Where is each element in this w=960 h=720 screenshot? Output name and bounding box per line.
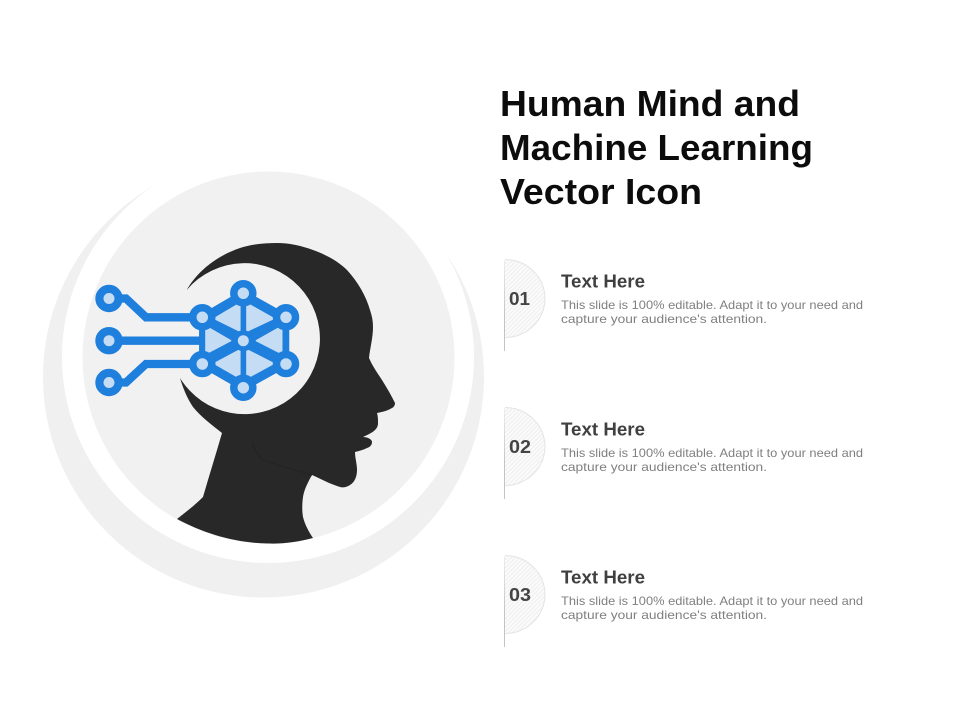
background crescent ring bbox=[43, 151, 484, 598]
icon: neural network circuit bbox=[99, 284, 296, 397]
circuit traces bbox=[109, 298, 202, 382]
item 02 bbox=[504, 408, 863, 499]
icon: human head silhouette bbox=[177, 243, 395, 544]
inner circle bbox=[82, 172, 454, 544]
item text 02: This slide is 100% editable. Adapt it to your need and bbox=[561, 446, 863, 460]
item heading 03: Text Here bbox=[561, 568, 645, 588]
item heading 01: Text Here bbox=[561, 272, 645, 292]
item text 03: capture your audience's attention. bbox=[561, 608, 767, 622]
item 01 bbox=[504, 260, 863, 351]
number badge 02: 02 bbox=[509, 436, 531, 457]
jaw shadow line bbox=[252, 443, 312, 475]
item heading 02: Text Here bbox=[561, 420, 645, 440]
number badge 01 bbox=[504, 260, 545, 351]
title: Vector Icon bbox=[500, 171, 702, 212]
number badge 03: 03 bbox=[509, 584, 531, 605]
item text 03: This slide is 100% editable. Adapt it to your need and bbox=[561, 594, 863, 608]
number badge 02 bbox=[504, 408, 545, 499]
item text 01: capture your audience's attention. bbox=[561, 312, 767, 326]
item text 01 bbox=[561, 298, 863, 326]
title bbox=[500, 83, 813, 212]
title: Human Mind and bbox=[500, 83, 800, 124]
item 03 bbox=[504, 556, 863, 647]
number badge 01: 01 bbox=[509, 288, 530, 309]
hexagon body bbox=[202, 293, 286, 388]
network nodes bbox=[99, 284, 296, 397]
item text 02: capture your audience's attention. bbox=[561, 460, 767, 474]
hexagon light cells bbox=[206, 304, 282, 378]
item text 02 bbox=[561, 446, 863, 474]
item text 03 bbox=[561, 594, 863, 622]
number badge 03 bbox=[504, 556, 545, 647]
title: Machine Learning bbox=[500, 127, 813, 168]
item text 01: This slide is 100% editable. Adapt it to your need and bbox=[561, 298, 863, 312]
